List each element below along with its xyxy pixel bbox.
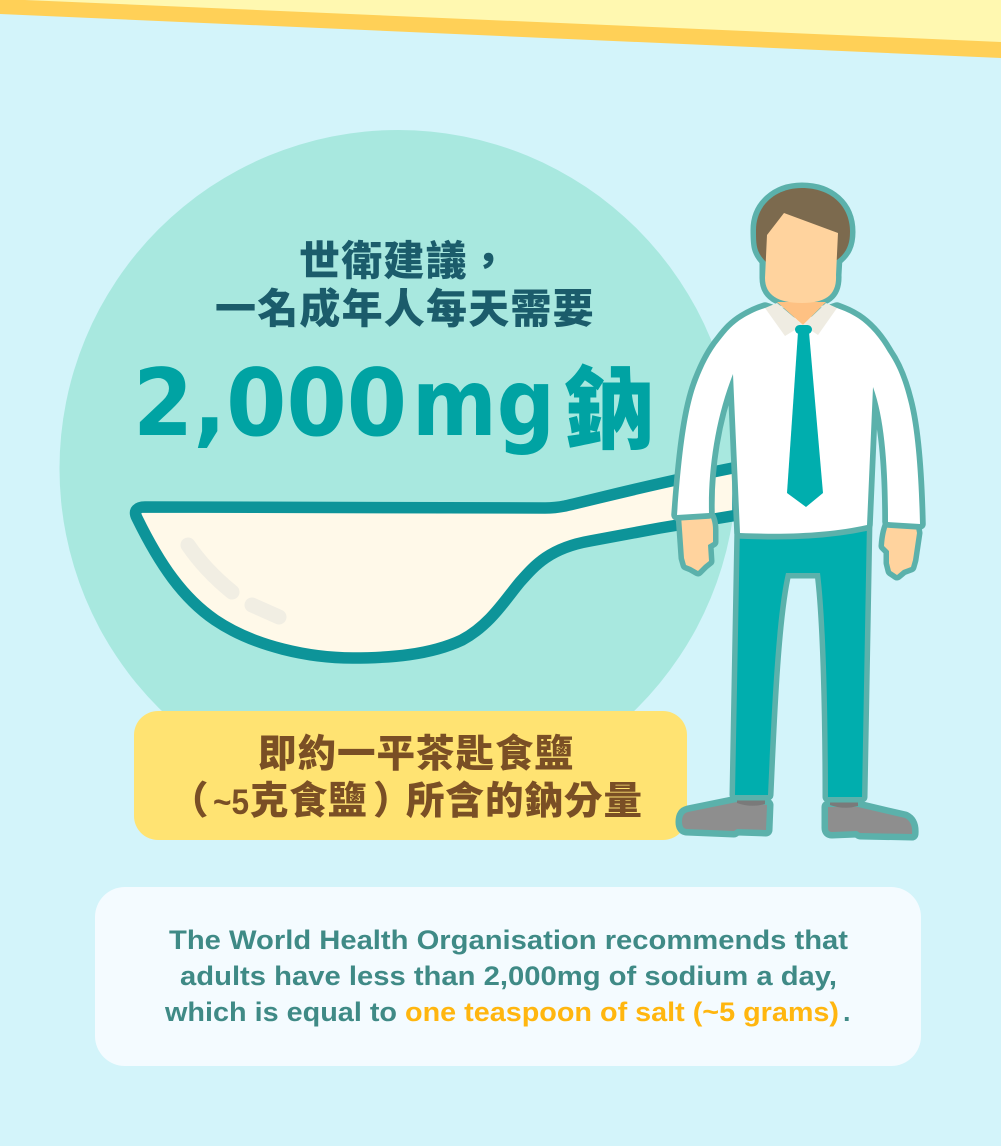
- icon: spoon: [136, 467, 738, 658]
- left hand: [681, 512, 713, 571]
- headline figure: 2,000mg sodium: 2,000: [133, 349, 407, 457]
- callout: one teaspoon of salt: 克食鹽: [250, 779, 367, 823]
- info panel: English summary: The World Health Organisation recommends that: [169, 925, 848, 955]
- left shoe: [682, 795, 767, 831]
- headline figure: 2,000mg sodium: [133, 349, 654, 461]
- collar: [765, 303, 837, 336]
- callout: one teaspoon of salt: ）: [373, 780, 412, 823]
- heading: WHO recommendation: [215, 238, 595, 332]
- headline figure: 2,000mg sodium: mg: [412, 349, 555, 457]
- right shoe: [828, 797, 912, 834]
- callout: one teaspoon of salt: 即約一平茶匙食鹽: [258, 732, 574, 776]
- info panel: English summary: adults have less than 2,000mg of sodium a day,: [180, 961, 837, 991]
- callout: one teaspoon of salt: [134, 711, 687, 840]
- info panel: English summary: one teaspoon of salt (~5 grams): [405, 997, 839, 1027]
- tie: [787, 325, 823, 507]
- callout: one teaspoon of salt: （: [170, 780, 209, 823]
- info panel: English summary: [95, 887, 921, 1066]
- callout: one teaspoon of salt: ~5: [213, 783, 249, 822]
- head: [756, 188, 850, 325]
- heading: WHO recommendation: 世衛建議，: [299, 238, 510, 284]
- headline figure: 2,000mg sodium: 鈉: [564, 361, 654, 461]
- background circle: [60, 130, 736, 807]
- shirt: [677, 308, 920, 534]
- callout: one teaspoon of salt: 所含的鈉分量: [406, 780, 643, 823]
- info panel: English summary: which is equal to: [164, 997, 397, 1027]
- trousers: [735, 520, 867, 797]
- heading: WHO recommendation: 一名成年人每天需要: [215, 286, 595, 332]
- top banner: [0, 0, 1001, 58]
- figure: man in shirt and tie: [677, 188, 920, 834]
- info panel: English summary: .: [843, 997, 851, 1027]
- right hand: [884, 521, 917, 575]
